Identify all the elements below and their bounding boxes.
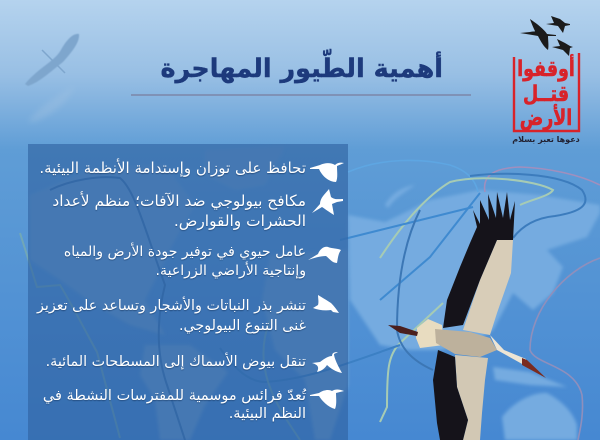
point 2	[52, 191, 306, 232]
point 3: عامل حيوي في توفير جودة الأرض والمياه	[64, 244, 306, 260]
stork body	[435, 329, 497, 357]
point 6	[43, 388, 306, 423]
bird icon 3	[308, 247, 341, 263]
point 5: تنقل بيوض الأسماك إلى المسطحات المائية.	[46, 354, 306, 370]
point 6: تُعدّ فرائس موسمية للمفترسات النشطة في	[43, 388, 306, 404]
text panel background	[28, 144, 348, 440]
logo text: أوقفوا	[517, 53, 575, 82]
migration flyways	[20, 160, 600, 440]
point 2: مكافح بيولوجي ضد الآفات؛ منظم لأعداد	[52, 192, 306, 210]
logo tagline: دعوها تعبر بسلام	[512, 135, 580, 144]
stork	[388, 192, 546, 440]
bird icon 2	[312, 189, 343, 215]
stork upper wing white	[463, 240, 513, 335]
logo frame	[514, 53, 579, 131]
logo text: الأرض	[520, 103, 572, 131]
point 4: تنشر بذر النباتات والأشجار وتساعد على تعزيز	[37, 298, 306, 314]
logo text	[517, 53, 575, 131]
stork neck	[490, 335, 526, 365]
bird icon 4	[313, 295, 339, 313]
stork lower wing black	[433, 350, 468, 440]
world map	[30, 146, 600, 440]
stork tail	[416, 319, 444, 348]
title rule	[131, 94, 471, 96]
point 3: وإنتاجية الأراضي الزراعية.	[156, 263, 306, 279]
stork lower wing white	[455, 355, 488, 440]
point 1: تحافظ على توزان وإستدامة الأنظمة البيئية.	[39, 159, 306, 177]
logo text: قتــل	[523, 81, 569, 107]
point 3	[64, 242, 306, 280]
point 4	[36, 296, 306, 335]
bird icon 1	[310, 163, 344, 182]
point 2: الحشرات والقوارض.	[174, 212, 306, 230]
title: أهمية الطّيور المهاجرة	[160, 54, 443, 84]
bird icon 5	[312, 352, 342, 373]
point 6: النظم البيئية.	[229, 406, 306, 422]
bird icons	[308, 163, 344, 409]
logo birds	[520, 16, 573, 56]
faded bird top left	[25, 34, 79, 122]
stork bill	[522, 358, 546, 378]
stork upper wing black	[443, 192, 515, 328]
bird icon 6	[310, 390, 344, 409]
point 4: غنى التنوع البيولوجي.	[179, 318, 306, 334]
